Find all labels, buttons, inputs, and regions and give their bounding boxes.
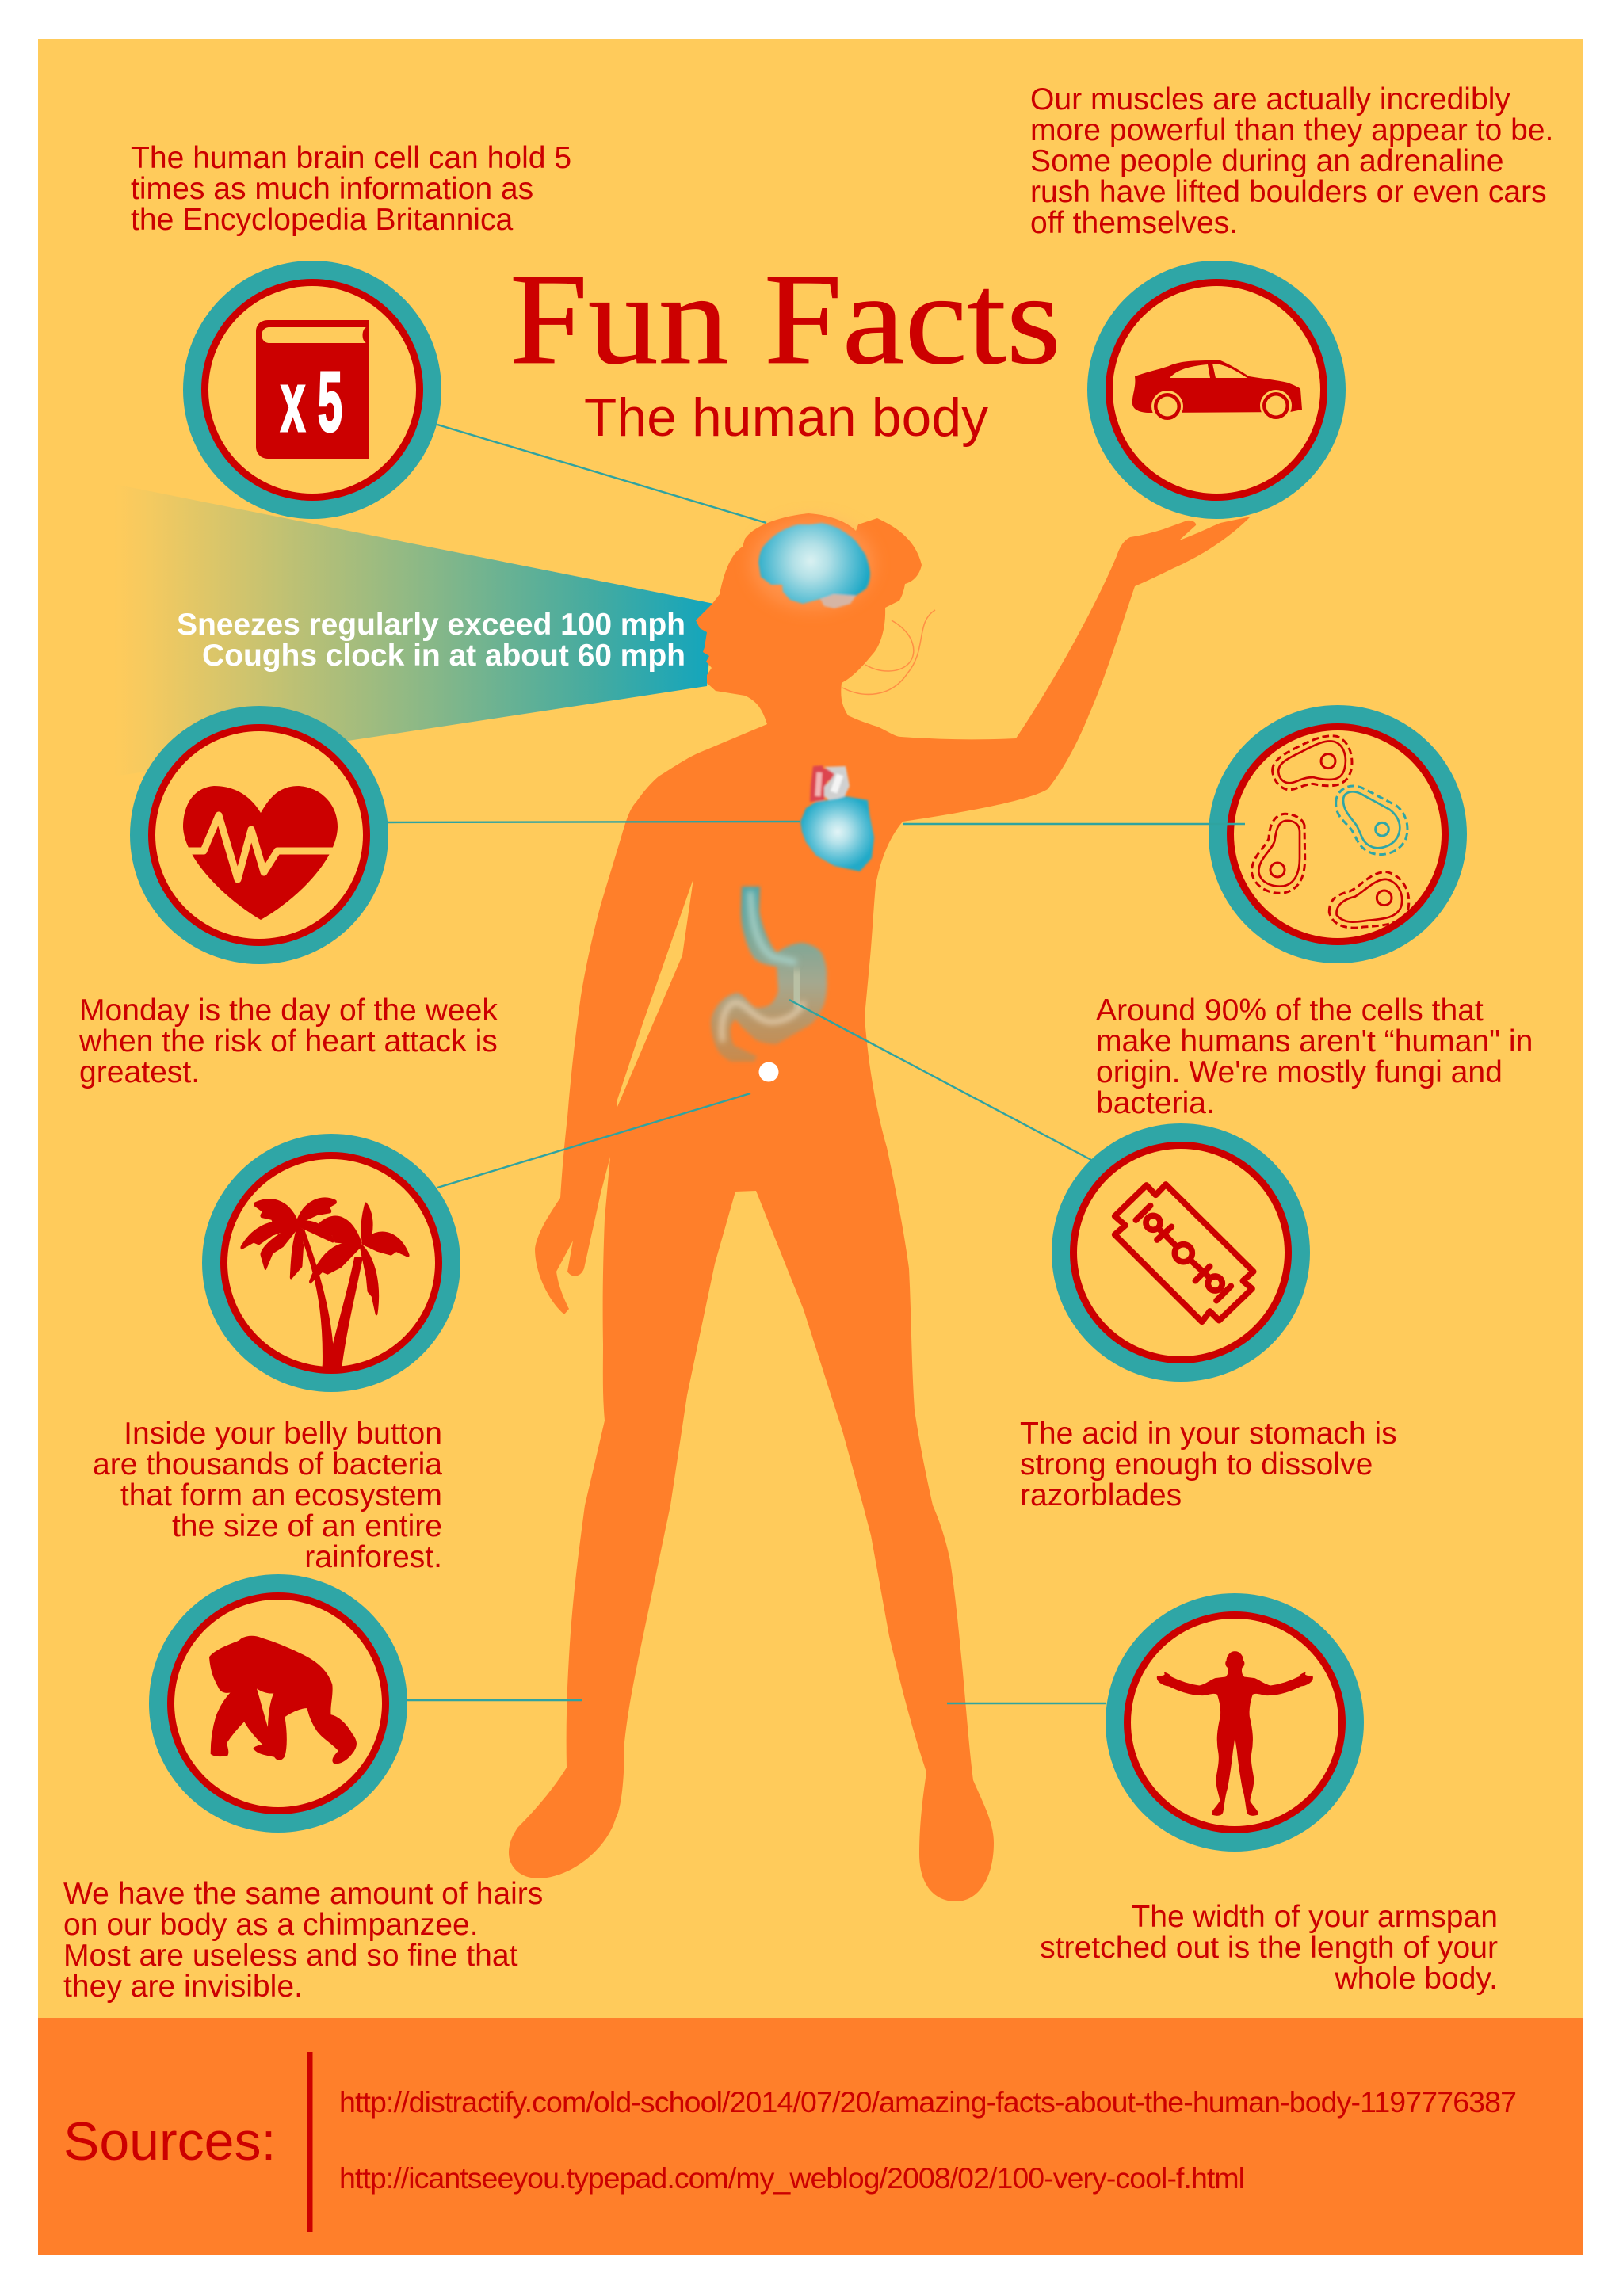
text: armspan fact: [1040, 1900, 1498, 1996]
circle: book icon: [183, 261, 441, 519]
icon: book: [256, 320, 369, 459]
text: muscles fact: Some people during an adrenaline: [1030, 144, 1503, 178]
text: sneeze fact: Coughs clock in at about 60 mph: [202, 639, 685, 673]
sources links: [339, 2085, 1517, 2195]
icon: cells: [1251, 736, 1409, 928]
organ: brain: [750, 518, 874, 610]
hair strands: [842, 610, 935, 694]
sources links: http://distractify.com/old-school/2014/07/20/amazing-facts-about-the-human-body-1197776387: [339, 2085, 1517, 2119]
text: razor fact: strong enough to dissolve: [1020, 1447, 1373, 1482]
organ: stomach: [711, 887, 827, 1062]
text: razor fact: [1020, 1417, 1397, 1512]
text: razor fact: razorblades: [1020, 1478, 1182, 1512]
circle: razor blade icon: [1052, 1123, 1310, 1382]
circle: armspan figure icon: [1106, 1593, 1364, 1852]
belly button: [759, 1062, 778, 1082]
connector lines: [388, 425, 1245, 1703]
text: brain fact: The human brain cell can hold 5: [131, 141, 571, 175]
text: chimpanzee fact: We have the same amount of hairs: [63, 1877, 543, 1911]
icon: razor blade: [1115, 1184, 1254, 1322]
text: sneeze fact: Sneezes regularly exceed 100 mph: [177, 608, 685, 642]
organ: heart: [800, 765, 874, 871]
text: heart fact: [78, 994, 498, 1089]
circle: car icon: [1087, 261, 1346, 519]
circle: heart icon: [130, 706, 388, 964]
icon: human figure: [1158, 1652, 1312, 1815]
text: muscles fact: [1030, 82, 1553, 240]
text: belly button fact: [93, 1417, 442, 1574]
cell left: [1251, 814, 1305, 893]
text: belly button fact: that form an ecosystem: [120, 1478, 442, 1512]
title: Fun Facts: [510, 246, 1061, 391]
text: heart fact: greatest.: [79, 1055, 200, 1089]
circle: chimpanzee icon: [149, 1574, 407, 1833]
sneeze cone: [114, 484, 714, 776]
text: heart fact: when the risk of heart attack is: [78, 1024, 498, 1058]
text: cells fact: bacteria.: [1096, 1086, 1215, 1120]
subtitle: The human body: [584, 388, 988, 448]
text: brain fact: the Encyclopedia Britannica: [131, 203, 514, 237]
text: cells fact: make humans aren't “human" in: [1096, 1024, 1533, 1058]
text: cells fact: [1096, 994, 1533, 1120]
cell teal: [1336, 786, 1407, 855]
text: chimpanzee fact: on our body as a chimpanzee.: [63, 1908, 479, 1942]
text: brain fact: [131, 141, 571, 237]
sources links: http://icantseeyou.typepad.com/my_weblog/2008/02/100-very-cool-f.html: [339, 2161, 1245, 2195]
text: muscles fact: off themselves.: [1030, 206, 1238, 240]
text: muscles fact: rush have lifted boulders or even cars: [1030, 175, 1547, 209]
text: cells fact: origin. We're mostly fungi and: [1096, 1055, 1503, 1089]
text: belly button fact: Inside your belly button: [124, 1417, 442, 1451]
text: chimpanzee fact: they are invisible.: [63, 1970, 303, 2004]
text: belly button fact: rainforest.: [304, 1540, 442, 1574]
icon: car: [1132, 360, 1302, 422]
text: armspan fact: whole body.: [1334, 1962, 1498, 1996]
text: cells fact: Around 90% of the cells that: [1096, 994, 1484, 1028]
text: brain fact: times as much information as: [131, 172, 533, 206]
body silhouette: [509, 513, 1251, 1901]
text: chimpanzee fact: Most are useless and so fine that: [63, 1939, 518, 1973]
cell bottom: [1329, 872, 1409, 928]
sources heading: Sources:: [63, 2111, 276, 2172]
cell top: [1273, 736, 1352, 790]
text: heart fact: Monday is the day of the week: [79, 994, 498, 1028]
text: armspan fact: stretched out is the length of your: [1040, 1931, 1498, 1965]
icon: palm trees: [242, 1199, 408, 1366]
text: muscles fact: Our muscles are actually incredibly: [1030, 82, 1510, 116]
sources panel background: [38, 2018, 1583, 2255]
circle: palm trees icon: [202, 1134, 460, 1392]
text: chimpanzee fact: [63, 1877, 543, 2004]
text: armspan fact: The width of your armspan: [1131, 1900, 1498, 1934]
circle: cells icon: [1209, 705, 1467, 963]
text: muscles fact: more powerful than they appear to be.: [1030, 113, 1553, 147]
text: belly button fact: are thousands of bacteria: [93, 1447, 442, 1482]
text: razor fact: The acid in your stomach is: [1020, 1417, 1397, 1451]
text: sneeze fact: [177, 608, 685, 673]
text: belly button fact: the size of an entire: [172, 1509, 442, 1543]
icon: chimpanzee: [210, 1637, 356, 1763]
sources divider: [307, 2052, 312, 2232]
icon: book: x 5: [281, 354, 342, 450]
icon: heartbeat: [178, 786, 341, 920]
